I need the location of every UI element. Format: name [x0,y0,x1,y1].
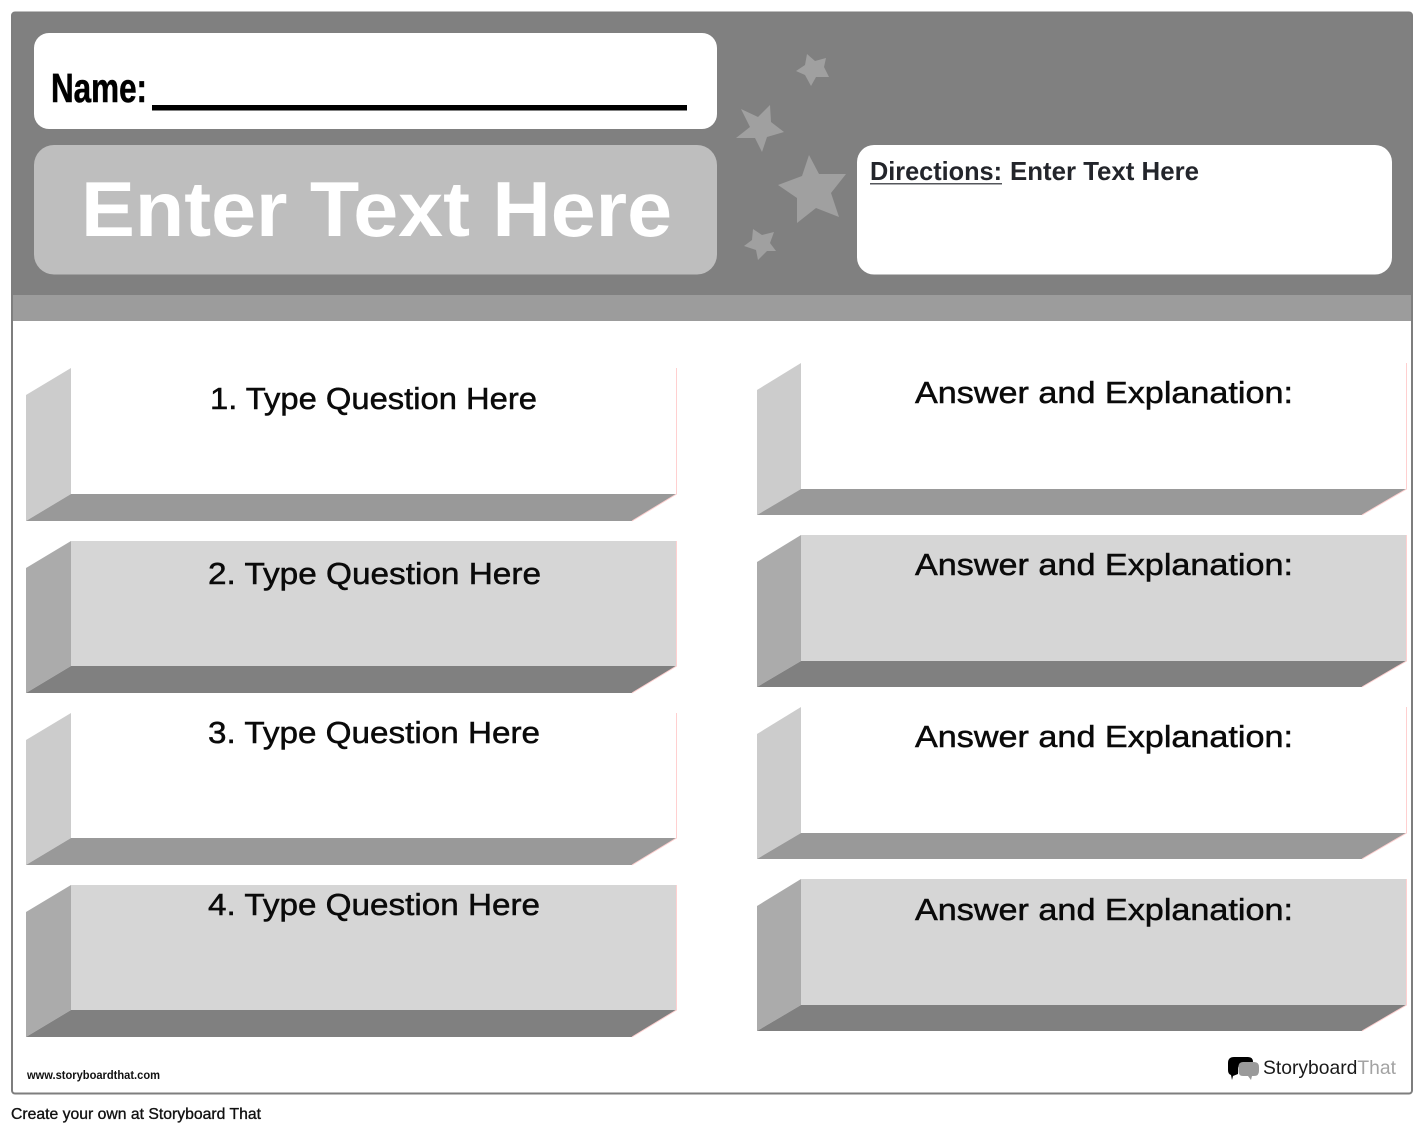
website url: www.storyboardthat.com [26,1068,160,1082]
title box [34,145,717,274]
question 4 [26,885,677,1037]
directions label: Directions: [870,156,1002,186]
directions box [857,145,1392,274]
name box [34,33,717,129]
question 2 [26,541,677,693]
name panel [34,33,717,129]
header band [13,13,1411,295]
answer 2: Answer and Explanation: [915,547,1293,582]
header strip [13,295,1411,321]
question 3: 3. Type Question Here [208,715,540,750]
question 1 [26,368,677,521]
star 3 [778,155,846,223]
answer 4: Answer and Explanation: [915,892,1293,927]
name label: Name: [51,65,147,111]
decorative stars [736,54,846,260]
answer 2 [757,535,1407,687]
question 4: 4. Type Question Here [208,887,540,922]
title text: Enter Text Here [81,165,672,253]
logo wordmark: StoryboardThat [1263,1057,1397,1079]
question 1: 1. Type Question Here [210,381,537,416]
icon: speech bubbles [1228,1057,1259,1080]
star 4 [744,229,776,260]
directions panel [857,145,1392,274]
name line [152,105,687,110]
footer credit: Create your own at Storyboard That [11,1106,262,1123]
answer 1: Answer and Explanation: [915,375,1293,410]
directions text: Enter Text Here [1010,156,1199,186]
answer 3 [757,707,1407,859]
star 1 [796,54,829,86]
question 3 [26,713,677,865]
answer 3: Answer and Explanation: [915,719,1293,754]
answer 4 [757,879,1407,1031]
storyboard that logo [1228,1057,1397,1080]
question 2: 2. Type Question Here [208,556,541,591]
answer 1 [757,363,1407,515]
title panel [34,145,717,274]
star 2 [736,105,784,152]
